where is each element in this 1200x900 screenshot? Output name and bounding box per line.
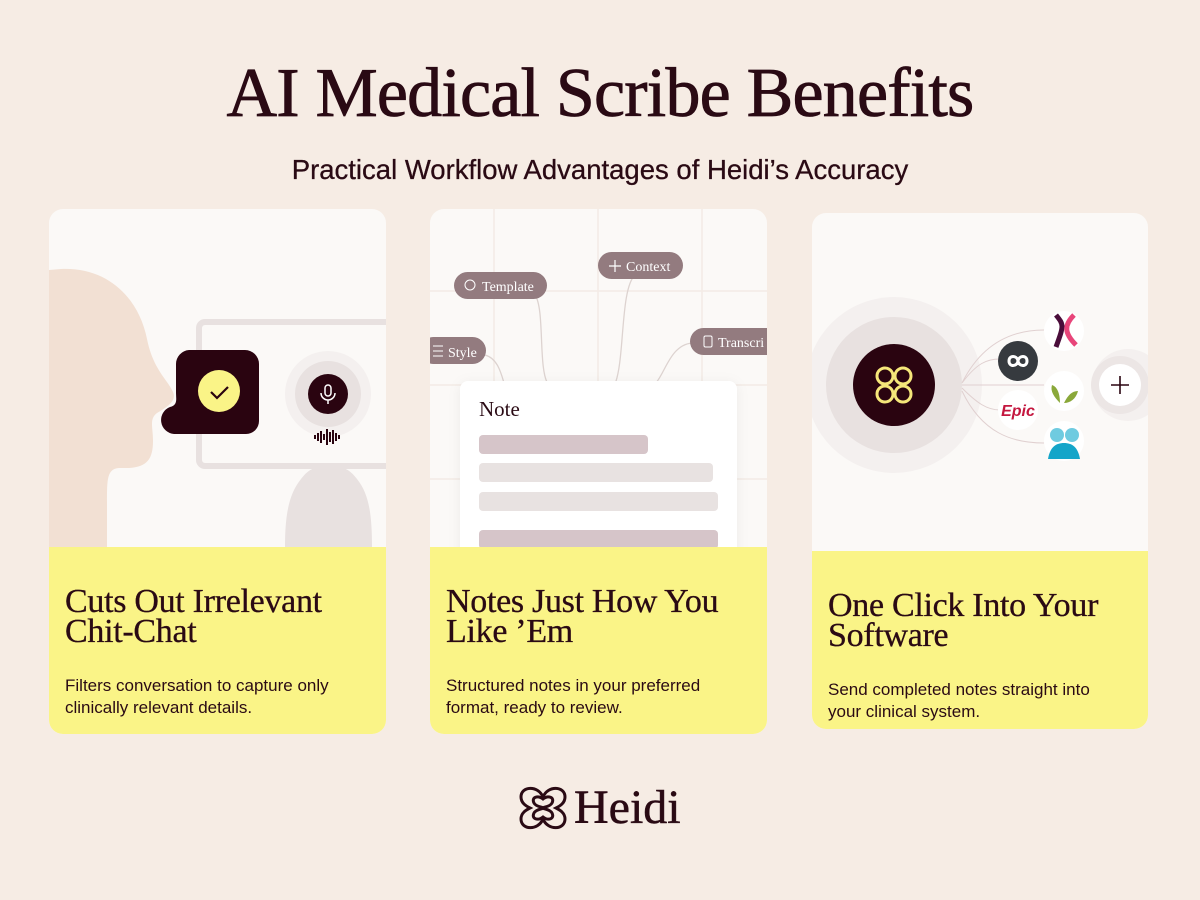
- illustration: note with inputs: Style: [448, 346, 477, 361]
- illustration: note with inputs: Transcri: [718, 336, 764, 351]
- text: notes how you like: format, ready to review.: [446, 698, 623, 717]
- panel: one click into software: [812, 213, 1148, 729]
- logo: Heidi: [520, 781, 681, 834]
- text: cuts out chit-chat: Chit-Chat: [65, 613, 196, 650]
- text: notes how you like: [430, 547, 767, 734]
- title: AI Medical Scribe Benefits: [226, 55, 974, 132]
- text: one click: One Click Into Your: [828, 587, 1098, 624]
- text: cuts out chit-chat: [49, 547, 386, 734]
- text: one click: your clinical system.: [828, 702, 980, 721]
- illustration: head, speech bubble, monitor: [49, 268, 386, 547]
- panel: cuts out chit-chat: [49, 209, 386, 734]
- text: cuts out chit-chat: Filters conversation to capture only: [65, 676, 329, 695]
- illustration: note with inputs: Context: [626, 260, 670, 275]
- text: one click: [812, 551, 1148, 729]
- illustration: integrations hub: [812, 297, 1148, 473]
- illustration: note with inputs: [430, 209, 767, 547]
- text: cuts out chit-chat: clinically relevant details.: [65, 698, 252, 717]
- panel: notes how you like: [430, 209, 767, 734]
- logo: Heidi: Heidi: [574, 781, 681, 834]
- text: notes how you like: Notes Just How You: [446, 583, 718, 620]
- text: notes how you like: Like ’Em: [446, 613, 573, 650]
- illustration: note with inputs: Template: [482, 280, 534, 295]
- text: notes how you like: Structured notes in your preferred: [446, 676, 700, 695]
- illustration: integrations hub: Epic: [1001, 403, 1035, 420]
- text: one click: Software: [828, 617, 948, 654]
- text: one click: Send completed notes straight into: [828, 680, 1090, 699]
- subtitle: Practical Workflow Advantages of Heidi’s Accuracy: [292, 154, 908, 185]
- text: cuts out chit-chat: Cuts Out Irrelevant: [65, 583, 322, 620]
- illustration: note with inputs: Note: [479, 397, 520, 421]
